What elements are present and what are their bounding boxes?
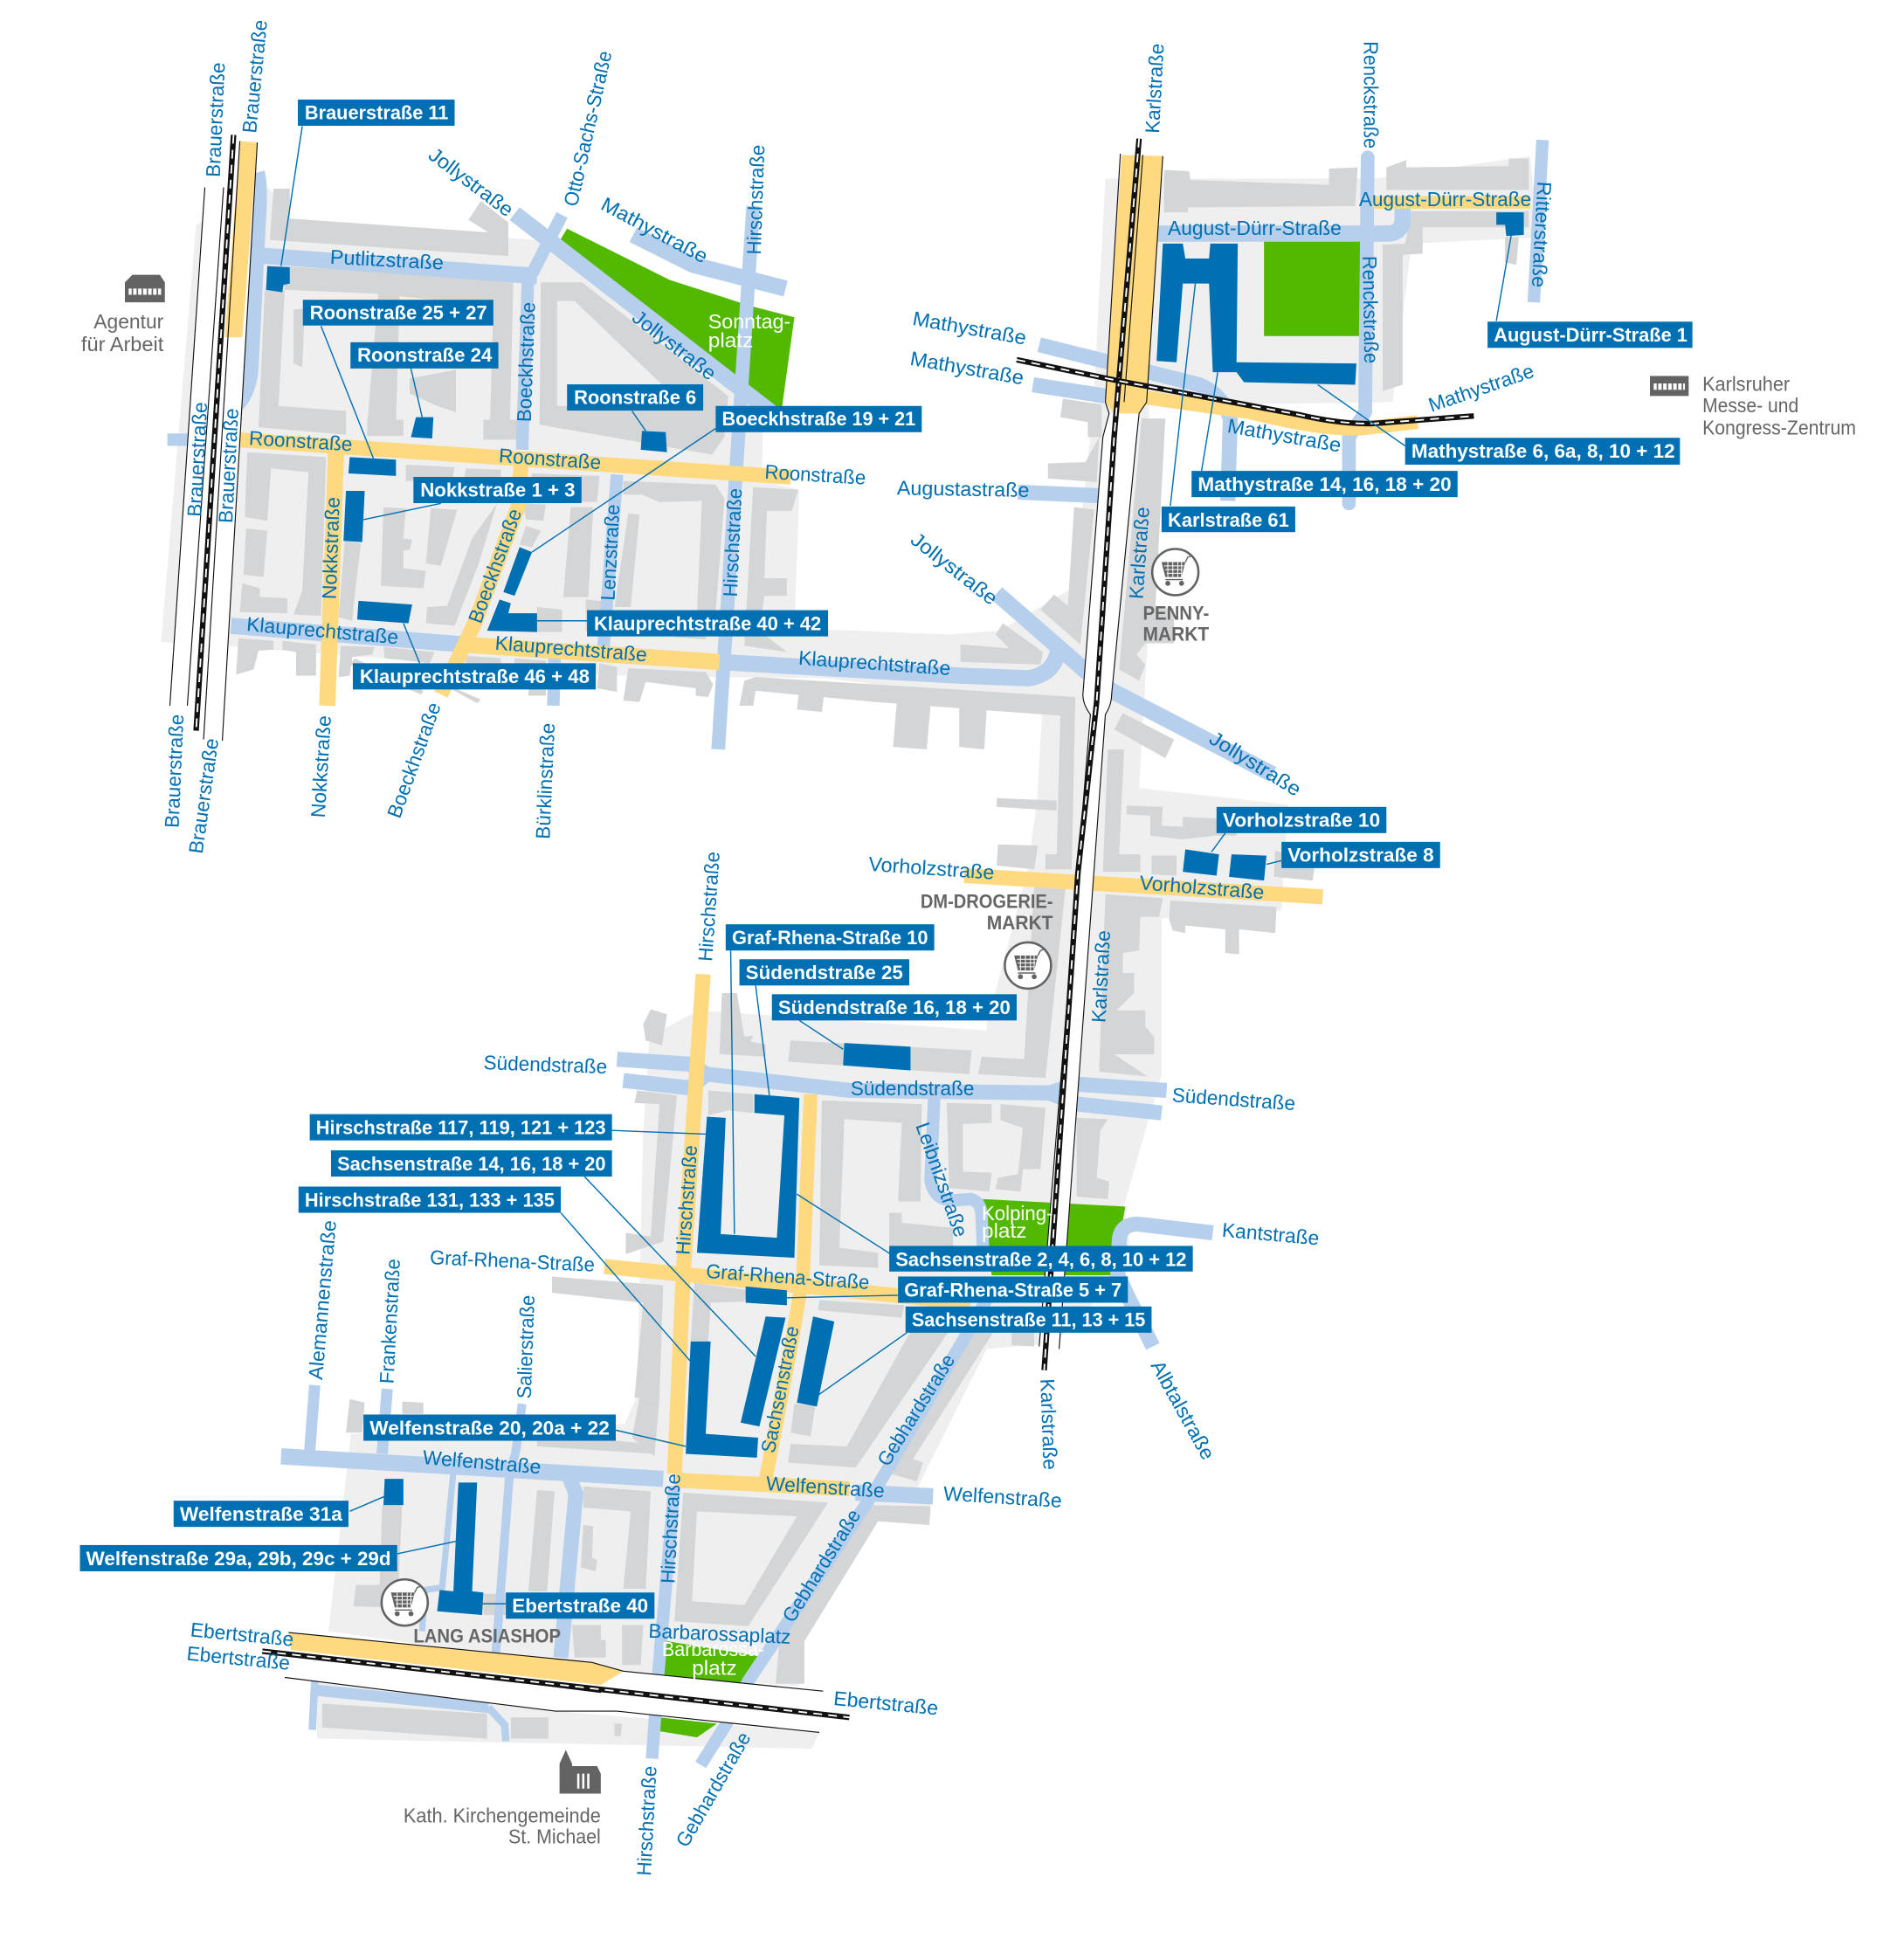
street names: Renckstraße: [1360, 41, 1383, 148]
street names: Hirschstraße: [656, 1473, 685, 1584]
street names: Vorholzstraße: [1139, 871, 1265, 903]
Mathystrasse rail: [1017, 360, 1473, 424]
icon: cart Lang Asiashop: [382, 1579, 428, 1625]
street names: Brauerstraße: [238, 18, 272, 135]
street names: Frankenstraße: [375, 1259, 404, 1384]
street names: Barbarossaplatz: [648, 1619, 791, 1648]
icon: cart Penny: [1152, 549, 1198, 595]
street names: Südendstraße: [483, 1051, 608, 1078]
callout: Welfenstraße 20, 20a + 22: [363, 1414, 686, 1446]
street names: Jollystraße: [424, 142, 518, 221]
street names: Salierstraße: [513, 1294, 539, 1399]
street names: Karlstraße: [1141, 43, 1168, 134]
text: Agentur für Arbeit: für Arbeit: [81, 333, 164, 355]
Karlstrasse rail corridor: [1039, 139, 1163, 1370]
callout: Welfenstraße 20, 20a + 22: Welfenstraße 20, 20a + 22: [369, 1417, 610, 1439]
street names: Südendstraße: [851, 1077, 974, 1100]
street names: Gebhardstraße: [671, 1728, 755, 1851]
icon: cart DM: [1004, 942, 1051, 989]
street names: Ebertstraße: [832, 1687, 939, 1719]
street names: Kantstraße: [1221, 1218, 1320, 1249]
street names: Nokkstraße: [307, 714, 335, 818]
callout: Roonstraße 6: Roonstraße 6: [574, 387, 696, 409]
callout: Sachsenstraße 11, 13 + 15: [818, 1307, 1151, 1395]
street names: Mathystraße: [597, 192, 712, 267]
text: Penny-Markt: PENNY-: [1142, 602, 1209, 624]
callout: Welfenstraße 31a: [174, 1496, 384, 1527]
highlighted streets: [238, 203, 1530, 1489]
street names: Brauerstraße: [183, 402, 211, 517]
street names: Boeckhstraße: [513, 301, 540, 423]
green square names: platz: [708, 329, 753, 352]
callout: Vorholzstraße 10: Vorholzstraße 10: [1223, 810, 1380, 832]
street names: [161, 18, 1556, 1876]
street names: Lenzstraße: [597, 504, 624, 601]
callout: Brauerstraße 11: [281, 100, 455, 266]
callout: Sachsenstraße 2, 4, 6, 8, 10 + 12: Sachsenstraße 2, 4, 6, 8, 10 + 12: [895, 1248, 1186, 1270]
callout: Karlstraße 61: Karlstraße 61: [1168, 509, 1289, 531]
callout: Südendstraße 25: [740, 959, 909, 1095]
street names: Südendstraße: [1171, 1083, 1296, 1115]
callout: Klauprechtstraße 46 + 48: Klauprechtstraße 46 + 48: [360, 666, 590, 687]
green squares: [560, 229, 1362, 1737]
street names: Hirschstraße: [671, 1144, 701, 1256]
side streets: [168, 140, 1542, 1765]
callout: Hirschstraße 117, 119, 121 + 123: [310, 1115, 706, 1141]
callout: Roonstraße 6: [567, 384, 703, 431]
street names: Gebhardstraße: [777, 1505, 865, 1626]
callout: Boeckhstraße 19 + 21: Boeckhstraße 19 + 21: [722, 408, 915, 430]
street names: Leibnizstraße: [911, 1119, 973, 1240]
callout: August-Dürr-Straße 1: August-Dürr-Straße 1: [1494, 324, 1687, 346]
green square names: Barbarossa-: [662, 1638, 764, 1660]
text: DM-Drogerie-Markt: MARKT: [987, 912, 1053, 934]
street names: Nokkstraße: [318, 497, 344, 600]
callout: Graf-Rhena-Straße 5 + 7: [787, 1276, 1128, 1303]
callout: Hirschstraße 117, 119, 121 + 123: Hirschstraße 117, 119, 121 + 123: [316, 1116, 606, 1138]
street names: Roonstraße: [248, 426, 353, 455]
street names: Klauprechtstraße: [494, 631, 648, 666]
street names: Ebertstraße: [186, 1642, 291, 1674]
street names: Klauprechtstraße: [797, 646, 951, 680]
street names: Alemannenstraße: [304, 1219, 341, 1381]
callout: Vorholzstraße 8: [1266, 842, 1440, 868]
street names: Boeckhstraße: [383, 700, 445, 821]
callout: Ebertstraße 40: Ebertstraße 40: [512, 1595, 648, 1617]
callout: Hirschstraße 131, 133 + 135: Hirschstraße 131, 133 + 135: [305, 1189, 555, 1211]
Brauerstrasse rail corridor: [169, 135, 258, 741]
callout: Sachsenstraße 14, 16, 18 + 20: Sachsenstraße 14, 16, 18 + 20: [337, 1153, 606, 1175]
callout: August-Dürr-Straße 1: [1487, 235, 1693, 348]
buildings: [236, 159, 1529, 1739]
callout: Welfenstraße 29a, 29b, 29c + 29d: Welfenstraße 29a, 29b, 29c + 29d: [86, 1548, 391, 1570]
street names: Ritterstraße: [1528, 181, 1556, 288]
street names: Brauerstraße: [202, 62, 229, 177]
green square names: [662, 310, 1052, 1680]
street names: Brauerstraße: [184, 737, 223, 855]
callout: Klauprechtstraße 40 + 42: Klauprechtstraße 40 + 42: [594, 612, 821, 634]
street names: Graf-Rhena-Straße: [706, 1260, 870, 1294]
street names: Karlstraße: [1036, 1378, 1062, 1470]
callout: Nokkstraße 1 + 3: Nokkstraße 1 + 3: [420, 479, 576, 500]
street names: August-Dürr-Straße: [1168, 217, 1342, 239]
icon: Agentur für Arbeit: [125, 275, 165, 302]
callout: Sachsenstraße 14, 16, 18 + 20: [331, 1150, 756, 1356]
street names: Graf-Rhena-Straße: [430, 1246, 595, 1276]
callout: Roonstraße 25 + 27: [303, 300, 493, 459]
callout: Roonstraße 24: Roonstraße 24: [357, 344, 493, 366]
street names: Jollystraße: [1205, 727, 1306, 801]
street names: Gebhardstraße: [873, 1349, 959, 1470]
callout: Graf-Rhena-Straße 10: [726, 924, 935, 1234]
street names: Hirschstraße: [719, 487, 746, 597]
callout: Mathystraße 14, 16, 18 + 20: Mathystraße 14, 16, 18 + 20: [1197, 473, 1452, 495]
street names: Mathystraße: [911, 307, 1028, 349]
city block background: [161, 156, 1539, 1749]
street names: Roonstraße: [764, 460, 866, 489]
text: Karlsruher Messe- und Kongress-Zentrum: Kongress-Zentrum: [1702, 417, 1856, 439]
street names: Roonstraße: [498, 444, 602, 473]
street names: Welfenstraße: [942, 1481, 1063, 1512]
text: Kath. Kirchengemeinde St. Michael: [404, 1804, 601, 1848]
callout: Welfenstraße 31a: Welfenstraße 31a: [180, 1503, 342, 1525]
callout: Welfenstraße 29a, 29b, 29c + 29d: [80, 1542, 456, 1571]
street names: Mathystraße: [1425, 359, 1536, 417]
green square names: Sonntag-: [708, 310, 790, 333]
street names: Karlstraße: [1087, 929, 1115, 1023]
callout: Sachsenstraße 2, 4, 6, 8, 10 + 12: [797, 1194, 1193, 1272]
callout: Brauerstraße 11: Brauerstraße 11: [305, 102, 448, 124]
street names: Putlitzstraße: [329, 245, 445, 274]
text: Karlsruher Messe- und Kongress-Zentrum: Karlsruher: [1702, 373, 1791, 396]
callout: Graf-Rhena-Straße 10: Graf-Rhena-Straße 10: [732, 927, 928, 949]
project buildings: [266, 212, 1524, 1615]
street names: Klauprechtstraße: [245, 612, 399, 648]
icon: Messe- und Kongress-Zentrum: [1650, 376, 1688, 396]
street names: Brauerstraße: [214, 408, 243, 523]
green square names: platz: [982, 1219, 1026, 1242]
street names: August-Dürr-Straße: [1359, 188, 1531, 210]
callout: Mathystraße 6, 6a, 8, 10 + 12: Mathystraße 6, 6a, 8, 10 + 12: [1411, 440, 1675, 462]
callout: Hirschstraße 131, 133 + 135: [299, 1187, 691, 1362]
street names: Renckstraße: [1358, 256, 1383, 363]
text: DM-Drogerie-Markt: DM-DROGERIE-: [921, 891, 1052, 913]
callout: Ebertstraße 40: [482, 1592, 654, 1618]
callout: Südendstraße 25: Südendstraße 25: [746, 962, 903, 983]
text: Lang Asiashop: LANG ASIASHOP: [413, 1625, 561, 1646]
street names: Hirschstraße: [632, 1765, 661, 1876]
text: Kath. Kirchengemeinde St. Michael: Kath. Kirchengemeinde: [404, 1804, 601, 1826]
street names: Welfenstraße: [422, 1446, 542, 1478]
callout: Klauprechtstraße 46 + 48: [353, 624, 596, 689]
callout: Südendstraße 16, 18 + 20: Südendstraße 16, 18 + 20: [778, 997, 1011, 1018]
street names: Bürklinstraße: [531, 722, 559, 839]
callout: Nokkstraße 1 + 3: [363, 477, 582, 520]
street names: Boeckhstraße: [464, 506, 526, 626]
Ebertstrasse rail corridor: [262, 1632, 849, 1732]
street names: Mathystraße: [1225, 414, 1342, 457]
text: Penny-Markt: [1142, 602, 1210, 645]
callout: Sachsenstraße 11, 13 + 15: Sachsenstraße 11, 13 + 15: [912, 1309, 1145, 1331]
callout: Klauprechtstraße 40 + 42: [537, 611, 828, 637]
text: DM-Drogerie-Markt: [921, 891, 1053, 934]
street names: Jollystraße: [628, 306, 721, 384]
callout: Karlstraße 61: [1162, 284, 1295, 532]
text: Karlsruher Messe- und Kongress-Zentrum: Messe- und: [1702, 394, 1798, 417]
text: Karlsruher Messe- und Kongress-Zentrum: [1702, 373, 1856, 439]
callout: Südendstraße 16, 18 + 20: [772, 994, 1017, 1049]
callout: Graf-Rhena-Straße 5 + 7: Graf-Rhena-Straße 5 + 7: [904, 1279, 1121, 1301]
callout: Roonstraße 24: [350, 342, 499, 418]
callout: Roonstraße 25 + 27: Roonstraße 25 + 27: [310, 301, 487, 323]
street names: Hirschstraße: [742, 144, 769, 255]
callout: Vorholzstraße 10: [1211, 807, 1386, 852]
street names: Otto-Sachs-Straße: [559, 49, 616, 209]
text: Kath. Kirchengemeinde St. Michael: St. Michael: [508, 1825, 601, 1848]
street names: Vorholzstraße: [867, 852, 995, 884]
street names: Sachsenstraße: [756, 1324, 804, 1454]
street names: Augustastraße: [897, 476, 1030, 501]
icon: church: [560, 1750, 601, 1793]
street names: Ebertstraße: [190, 1618, 295, 1651]
callout: Vorholzstraße 8: Vorholzstraße 8: [1287, 845, 1434, 866]
callout: Mathystraße 14, 16, 18 + 20: [1191, 372, 1458, 497]
street names: Brauerstraße: [161, 714, 188, 828]
text: Penny-Markt: MARKT: [1142, 624, 1210, 645]
green square names: Kolping-: [982, 1202, 1052, 1225]
street names: Hirschstraße: [694, 851, 724, 962]
street names: Albtalstraße: [1147, 1356, 1219, 1463]
street names: Karlstraße: [1124, 506, 1154, 600]
street names: Jollystraße: [907, 528, 1002, 610]
callout: Mathystraße 6, 6a, 8, 10 + 12: [1318, 384, 1680, 465]
street names: Mathystraße: [908, 347, 1025, 389]
text: Agentur für Arbeit: [81, 310, 164, 355]
text: Agentur für Arbeit: Agentur: [93, 310, 164, 333]
callout: Boeckhstraße 19 + 21: [532, 406, 921, 552]
green square names: platz: [692, 1657, 737, 1680]
street names: Welfenstraße: [765, 1472, 885, 1502]
